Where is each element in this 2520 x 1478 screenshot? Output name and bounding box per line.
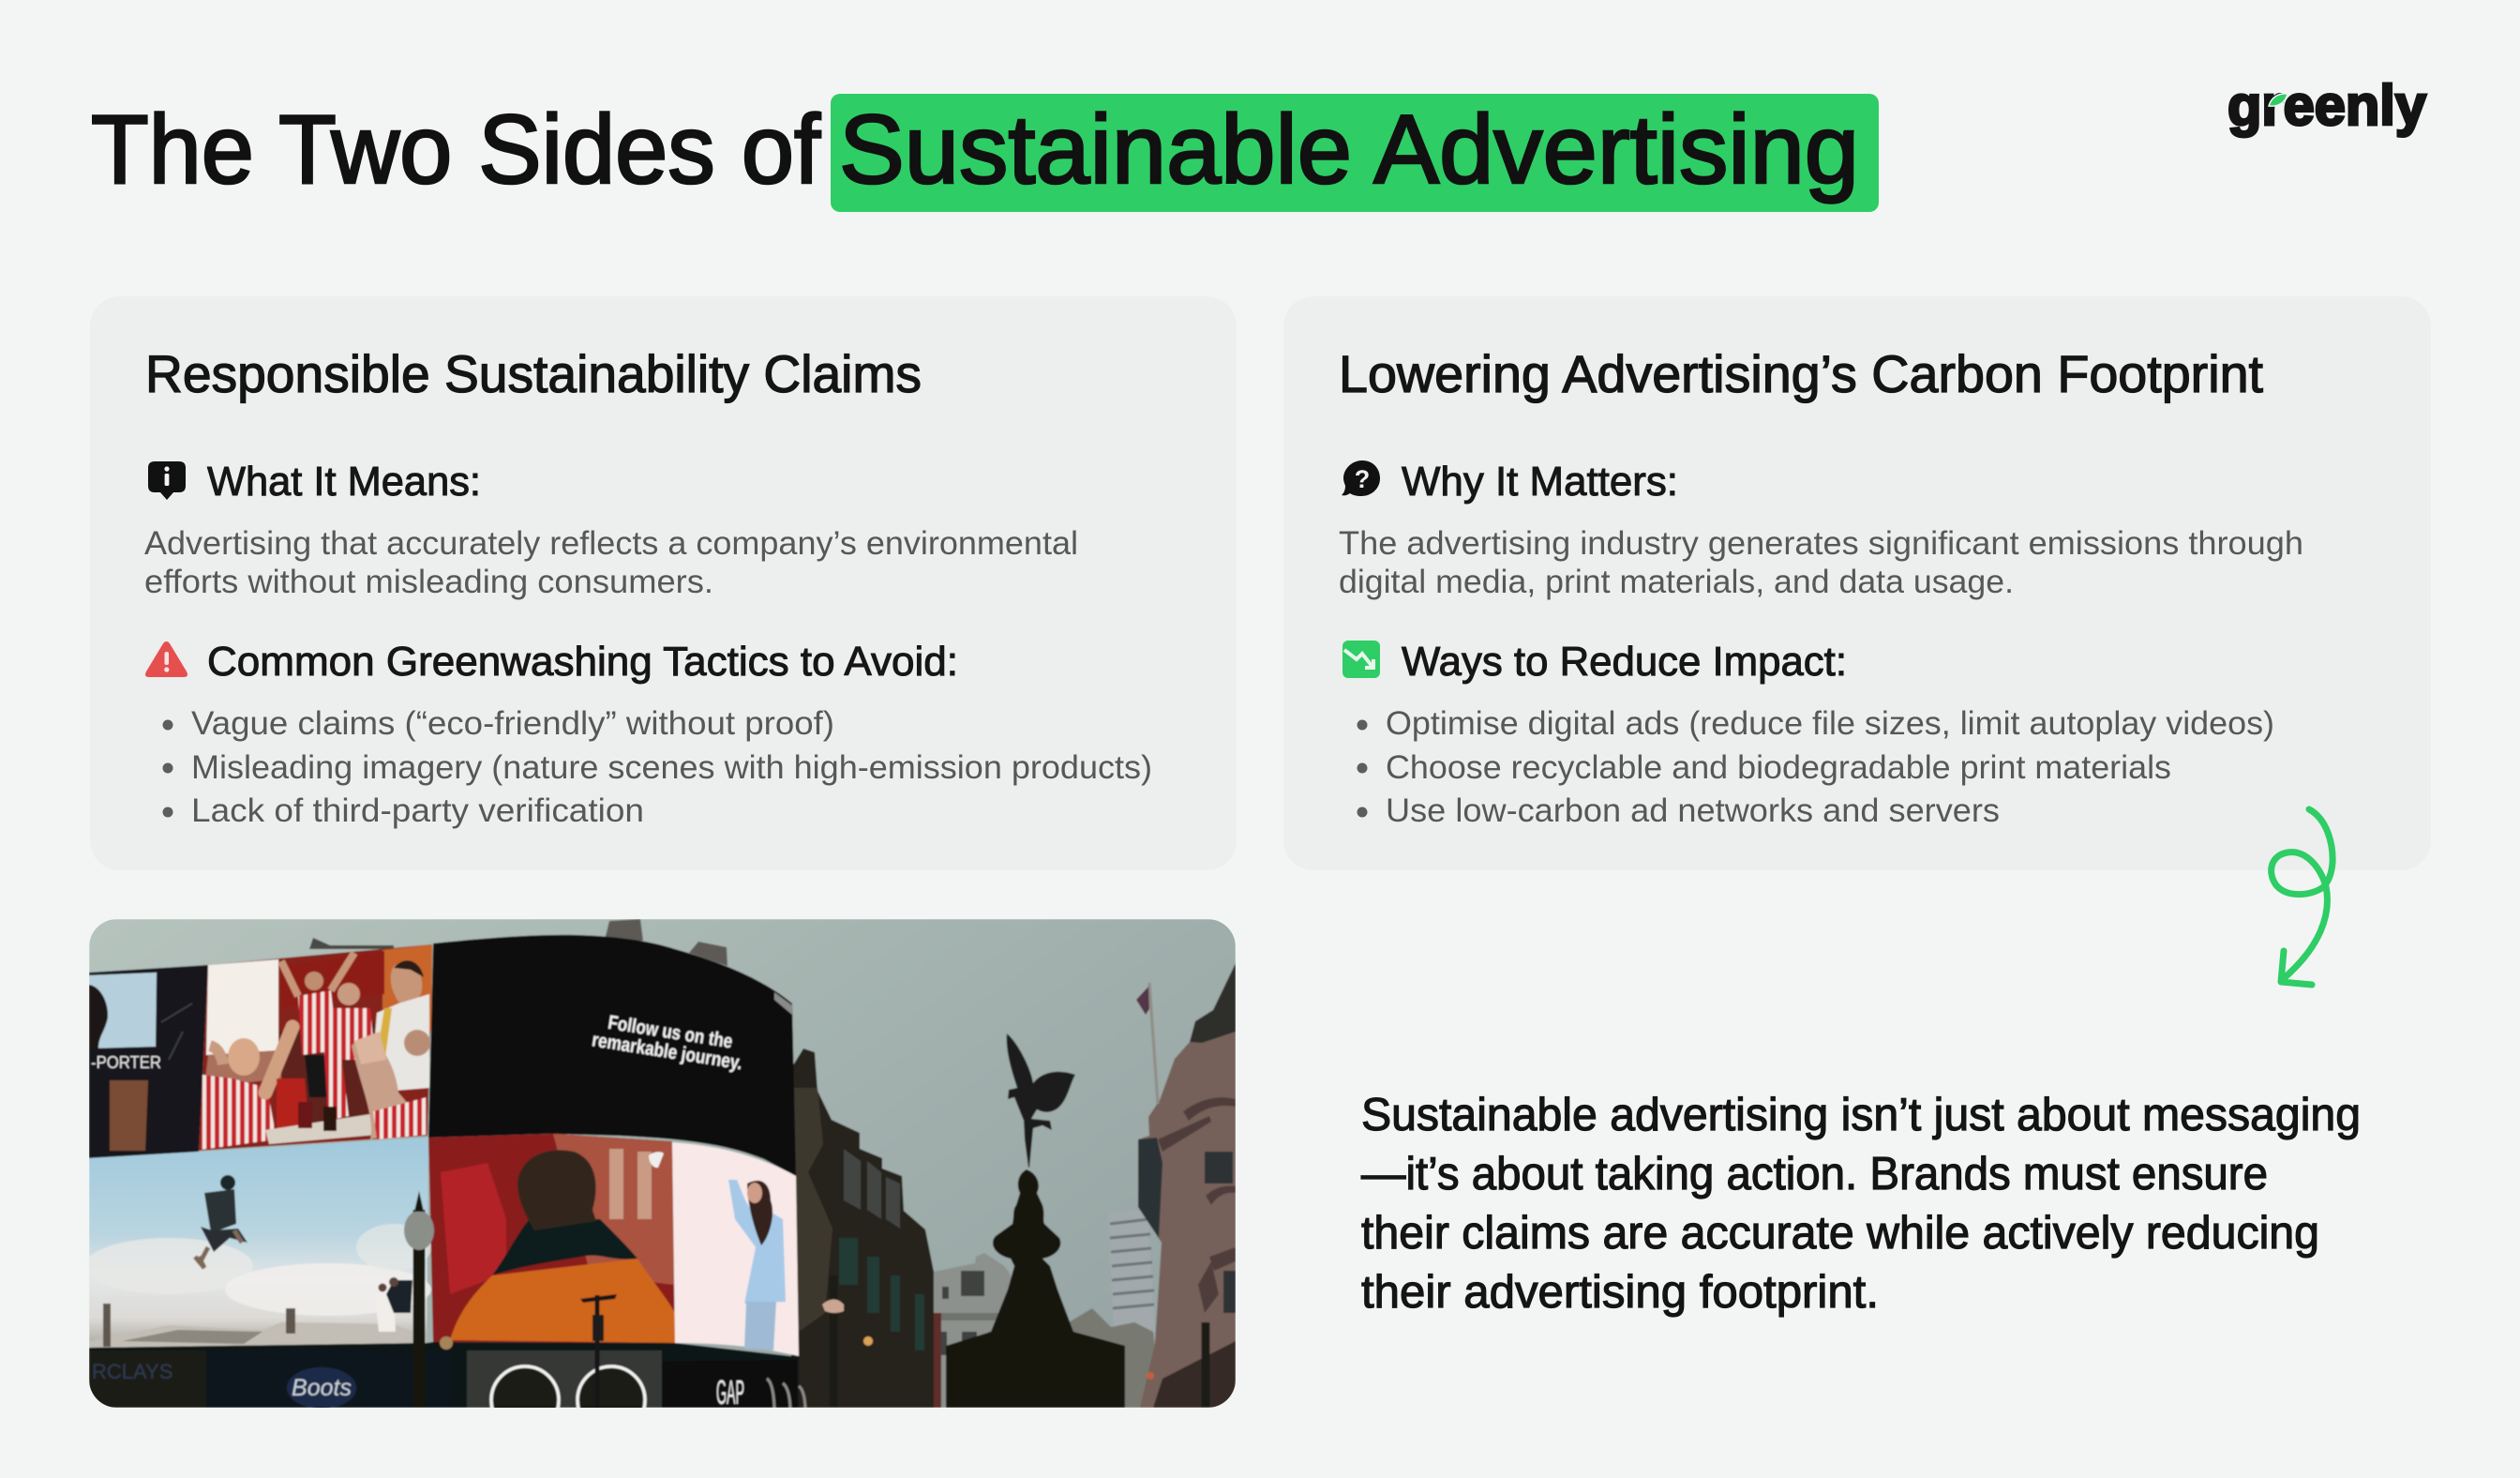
street lower frontage: Boots bbox=[292, 1375, 352, 1401]
panel heading: Lowering Advertising’s Carbon Footprint bbox=[1339, 344, 2263, 403]
Eros statue and fountain bbox=[1007, 1033, 1075, 1168]
tall tower bbox=[1113, 1232, 1153, 1331]
title bbox=[91, 94, 1879, 212]
bullet list: reduction methods bbox=[1358, 705, 2274, 829]
conclusion text: their claims are accurate while actively reducing bbox=[1361, 1208, 2319, 1259]
title highlight bbox=[831, 94, 1879, 212]
hand-drawn green arrow bbox=[2272, 809, 2332, 985]
bullet list: tactics: Vague claims (“eco-friendly” without proof) bbox=[191, 705, 834, 742]
screen: football fans bbox=[199, 944, 432, 1151]
icon: downward trend bbox=[1342, 641, 1380, 678]
bullet list: reduction methods: Choose recyclable and biodegradable print materials bbox=[1386, 749, 2171, 786]
description text: Advertising that accurately reflects a company’s environmental bbox=[144, 525, 1078, 562]
table and drinks bbox=[265, 1114, 377, 1144]
left dark building bbox=[791, 1048, 934, 1408]
screen: black upper bbox=[428, 935, 796, 1176]
conclusion text: their advertising footprint. bbox=[1361, 1267, 1879, 1318]
screen: left black bbox=[89, 965, 208, 1158]
low distant buildings bbox=[1069, 1308, 1162, 1408]
logo: greenly: greenly bbox=[2228, 74, 2427, 137]
panel heading: Responsible Sustainability Claims bbox=[145, 344, 922, 403]
bullet list: tactics: Misleading imagery (nature scenes with high-emission products) bbox=[191, 749, 1152, 786]
distant light building bbox=[933, 1253, 1012, 1408]
description text: The advertising industry generates significant emissions through bbox=[1339, 525, 2303, 562]
screen: woman in blue bbox=[672, 1142, 799, 1356]
lamp posts bbox=[404, 1191, 617, 1408]
title: Sustainable Advertising bbox=[839, 96, 1859, 204]
icon: question speech bubble bbox=[1342, 460, 1380, 496]
screen: skater bbox=[84, 1138, 431, 1348]
description text: digital media, print materials, and data usage. bbox=[1339, 564, 2014, 600]
title: The Two Sides of bbox=[91, 96, 821, 204]
conclusion text bbox=[1361, 1090, 2361, 1318]
screen: orange jacket man bbox=[428, 1134, 675, 1343]
description text bbox=[144, 525, 1078, 600]
flag bbox=[1149, 983, 1158, 1104]
lower right fan bbox=[351, 1043, 407, 1140]
conclusion text: Sustainable advertising isn’t just about messaging bbox=[1361, 1090, 2361, 1140]
subheading: why it matters: Why It Matters: bbox=[1402, 459, 1678, 505]
conclusion text: —it’s about taking action. Brands must ensure bbox=[1361, 1149, 2268, 1199]
middle fan bbox=[305, 972, 323, 990]
Follow us text bbox=[591, 1010, 747, 1074]
glasses fan bbox=[338, 983, 360, 1005]
description text bbox=[1339, 525, 2303, 600]
street lower frontage: GAP bbox=[716, 1373, 744, 1411]
right fan bbox=[391, 962, 422, 1006]
panel: responsible sustainability claims bbox=[90, 296, 1237, 870]
chimneys behind screen bbox=[605, 919, 728, 966]
bullet list: reduction methods: Optimise digital ads (reduce file sizes, limit autoplay videos) bbox=[1386, 705, 2274, 742]
icon: warning triangle bbox=[145, 641, 188, 677]
bald fan bbox=[228, 1038, 260, 1076]
bullet list: reduction methods: Use low-carbon ad networks and servers bbox=[1386, 792, 2000, 829]
photo: Piccadilly Circus billboards bbox=[84, 919, 1236, 1434]
icon: question speech bubble: ? bbox=[1355, 465, 1370, 493]
Follow us text: remarkable journey. bbox=[591, 1029, 743, 1074]
description text: efforts without misleading consumers. bbox=[144, 564, 713, 600]
street lower frontage: RCLAYS bbox=[92, 1360, 172, 1383]
street lower frontage bbox=[89, 1341, 808, 1408]
bullet list: tactics: Lack of third-party verification bbox=[191, 792, 644, 829]
bullet list: tactics bbox=[163, 705, 1152, 829]
subheading: greenwashing tactics: Common Greenwashing Tactics to Avoid: bbox=[207, 639, 958, 685]
PORTER text: -PORTER bbox=[91, 1053, 161, 1072]
subheading: ways to reduce impact: Ways to Reduce Impact: bbox=[1402, 639, 1847, 685]
right pink building bbox=[1139, 1031, 1236, 1408]
street lamp right bbox=[833, 1275, 1206, 1408]
subheading: what it means: What It Means: bbox=[207, 459, 481, 505]
panel: lowering carbon footprint bbox=[1283, 296, 2431, 870]
Follow us text: Follow us on the bbox=[607, 1012, 734, 1052]
icon: info speech bubble bbox=[148, 461, 186, 500]
